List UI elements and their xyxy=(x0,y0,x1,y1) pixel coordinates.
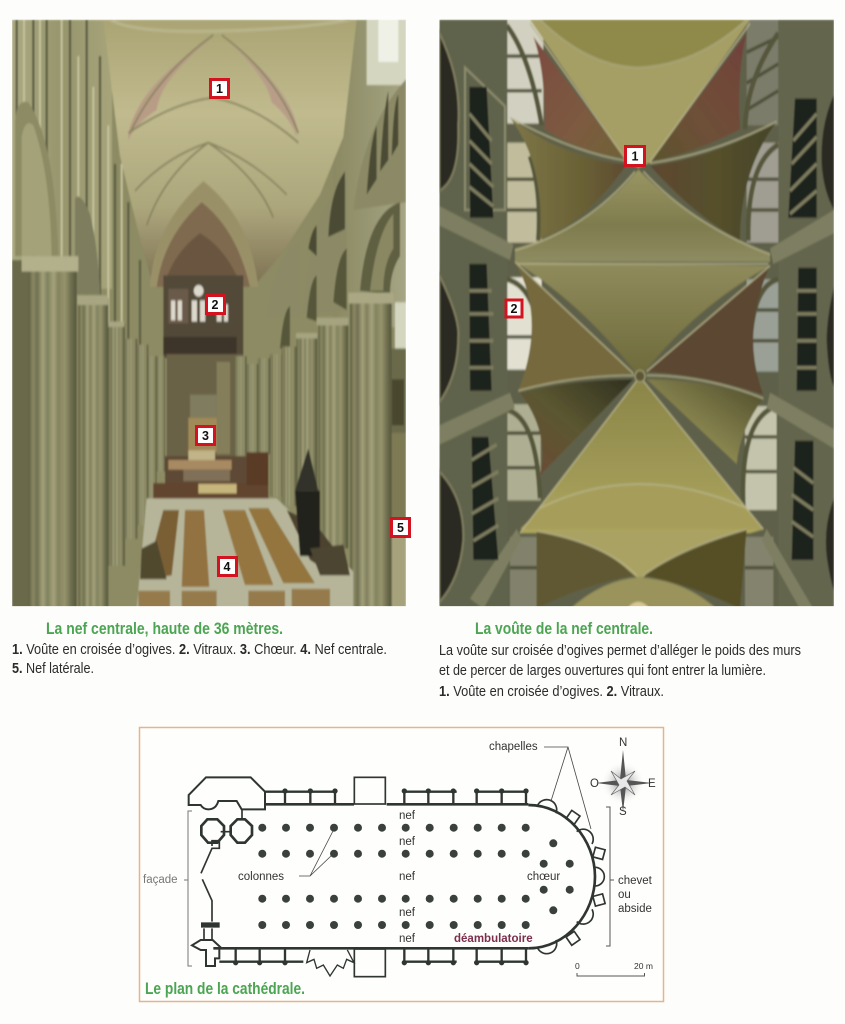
label 5 nef: 5 xyxy=(397,521,404,535)
scale bar xyxy=(577,973,644,976)
plan labels xyxy=(143,741,653,971)
columns xyxy=(258,824,574,929)
plan labels: chapelles xyxy=(489,741,538,753)
leader lines xyxy=(299,747,591,876)
chevet bracket xyxy=(606,807,614,946)
caption title: voûte: La voûte de la nef centrale. xyxy=(475,619,653,638)
caption text: voûte: et de percer de larges ouvertures qui font entrer la lumière. xyxy=(439,663,766,679)
windows xyxy=(505,20,779,609)
plan labels: colonnes xyxy=(238,871,284,883)
photo: nef centrale xyxy=(12,20,406,609)
compass rose xyxy=(590,737,656,818)
caption text: voûte: La voûte sur croisée d’ogives permet d’alléger le poids des murs xyxy=(439,643,801,659)
label 1 nef xyxy=(210,80,228,98)
label 5 nef xyxy=(392,518,410,536)
plan labels: nef xyxy=(399,907,416,919)
compass rose: E xyxy=(648,778,656,790)
caption text: nef xyxy=(12,642,387,677)
bottom buttresses xyxy=(219,949,527,963)
plan labels: abside xyxy=(618,903,652,915)
caption text: voûte: 1. Voûte en croisée d’ogives. 2. Vitraux. xyxy=(439,684,664,700)
label 1 voûte xyxy=(626,146,644,166)
label 1 nef: 1 xyxy=(216,82,223,96)
left shafts xyxy=(14,20,142,346)
plan labels: déambulatoire xyxy=(454,933,533,945)
label 4 nef: 4 xyxy=(224,560,231,574)
compass rose: N xyxy=(619,737,627,749)
right upper arcade xyxy=(267,79,406,609)
plan labels: chœur xyxy=(527,871,560,883)
floor plan xyxy=(189,777,605,977)
top buttresses xyxy=(265,790,527,804)
caption title: nef: La nef centrale, haute de 36 mètres. xyxy=(46,619,283,638)
pillars xyxy=(12,256,393,609)
side walls left xyxy=(439,20,522,609)
caption text: voûte xyxy=(439,643,801,700)
photo: voûte xyxy=(439,20,834,609)
choir and altar xyxy=(153,450,268,498)
plan labels: 0 xyxy=(575,961,580,971)
caption text: nef: 1. Voûte en croisée d’ogives. 2. Vitraux. 3. Chœur. 4. Nef centrale. xyxy=(12,642,387,658)
plan labels: ou xyxy=(618,889,631,901)
caption text: nef: 5. Nef latérale. xyxy=(12,661,94,677)
label 3 nef xyxy=(196,426,214,444)
label 3 nef: 3 xyxy=(202,429,209,443)
label 2 voûte: 2 xyxy=(511,302,518,316)
ribs xyxy=(510,23,777,575)
label 2 nef xyxy=(206,296,224,314)
compass rose: S xyxy=(619,806,627,818)
compass rose: O xyxy=(590,778,599,790)
label 2 nef: 2 xyxy=(212,298,219,312)
floor and chairs xyxy=(137,448,353,609)
plan labels: 20 m xyxy=(634,961,653,971)
plan labels: nef xyxy=(399,836,416,848)
panel: plan de la cathédrale xyxy=(140,728,664,1002)
vault webs xyxy=(530,20,750,168)
plan title: Le plan de la cathédrale. xyxy=(145,979,305,998)
label 2 voûte xyxy=(506,300,522,317)
plan labels: chevet xyxy=(618,875,653,887)
façade bracket xyxy=(184,811,192,966)
label 4 nef xyxy=(218,558,236,576)
side walls right xyxy=(762,20,834,609)
chapels xyxy=(537,800,605,954)
plan labels: nef xyxy=(399,933,416,945)
label 1 voûte: 1 xyxy=(632,150,639,164)
plan labels: nef xyxy=(399,810,416,822)
plan labels: façade xyxy=(143,874,178,886)
plan labels: nef xyxy=(399,871,416,883)
